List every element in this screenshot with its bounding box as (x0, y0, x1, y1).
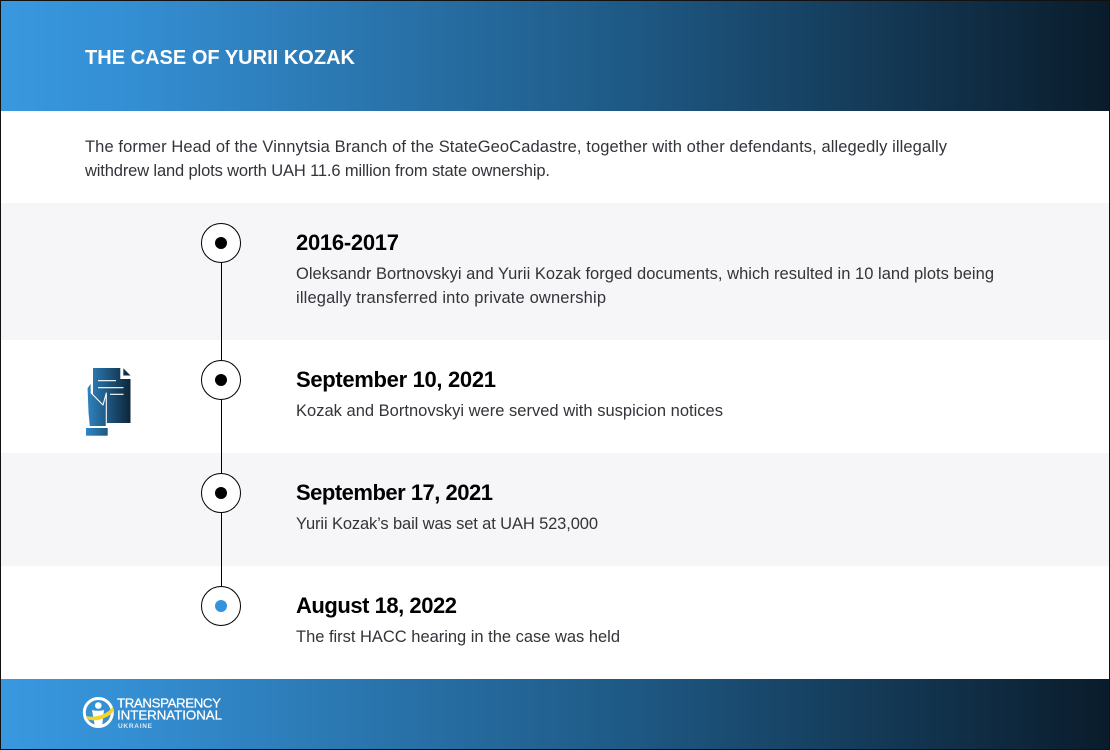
event: September 17, 2021: Yurii Kozak’s bail was set at UAH 523,000 (296, 515, 598, 533)
title: THE CASE OF YURII KOZAK (85, 47, 356, 69)
logo wordmark (117, 696, 222, 730)
event: 2016-2017 (296, 230, 994, 307)
logo wordmark: UKRAINE (118, 723, 153, 730)
intro text (84, 138, 948, 180)
event: 2016-2017: illegally transferred into private ownership (296, 289, 606, 307)
event: August 18, 2022: The first HACC hearing in the case was held (296, 628, 620, 646)
timeline marker 2 (202, 360, 240, 400)
logo wordmark: INTERNATIONAL (117, 708, 222, 722)
footer band (0, 679, 1110, 750)
event: August 18, 2022 (296, 593, 620, 646)
row background: 2016-2017 (0, 203, 1110, 340)
header band (0, 0, 1110, 111)
logo: Transparency International Ukraine (84, 696, 222, 730)
intro text: The former Head of the Vinnytsia Branch of the StateGeoCadastre, together with other defendants, allegedly illegally (85, 138, 948, 156)
event: August 18, 2022: August 18, 2022 (296, 593, 457, 618)
event: 2016-2017: Oleksandr Bortnovskyi and Yurii Kozak forged documents, which resulted in 10 land plots being (296, 265, 994, 283)
event: September 17, 2021: September 17, 2021 (296, 480, 493, 505)
event: September 17, 2021 (296, 480, 598, 533)
event: September 10, 2021 (296, 367, 723, 420)
intro text: withdrew land plots worth UAH 11.6 million from state ownership. (84, 162, 550, 180)
timeline marker 3 (202, 474, 240, 512)
logo wordmark: TRANSPARENCY (117, 696, 221, 710)
event: 2016-2017: 2016-2017 (296, 230, 399, 255)
icon: hand holding document (86, 368, 130, 436)
timeline (202, 224, 240, 626)
event: September 10, 2021: Kozak and Bortnovskyi were served with suspicion notices (296, 402, 723, 420)
timeline marker 4 (202, 586, 240, 626)
logo emblem (84, 698, 113, 727)
row background: September 17, 2021 (0, 453, 1110, 566)
event: September 10, 2021: September 10, 2021 (296, 367, 496, 392)
timeline marker 1 (202, 224, 240, 262)
